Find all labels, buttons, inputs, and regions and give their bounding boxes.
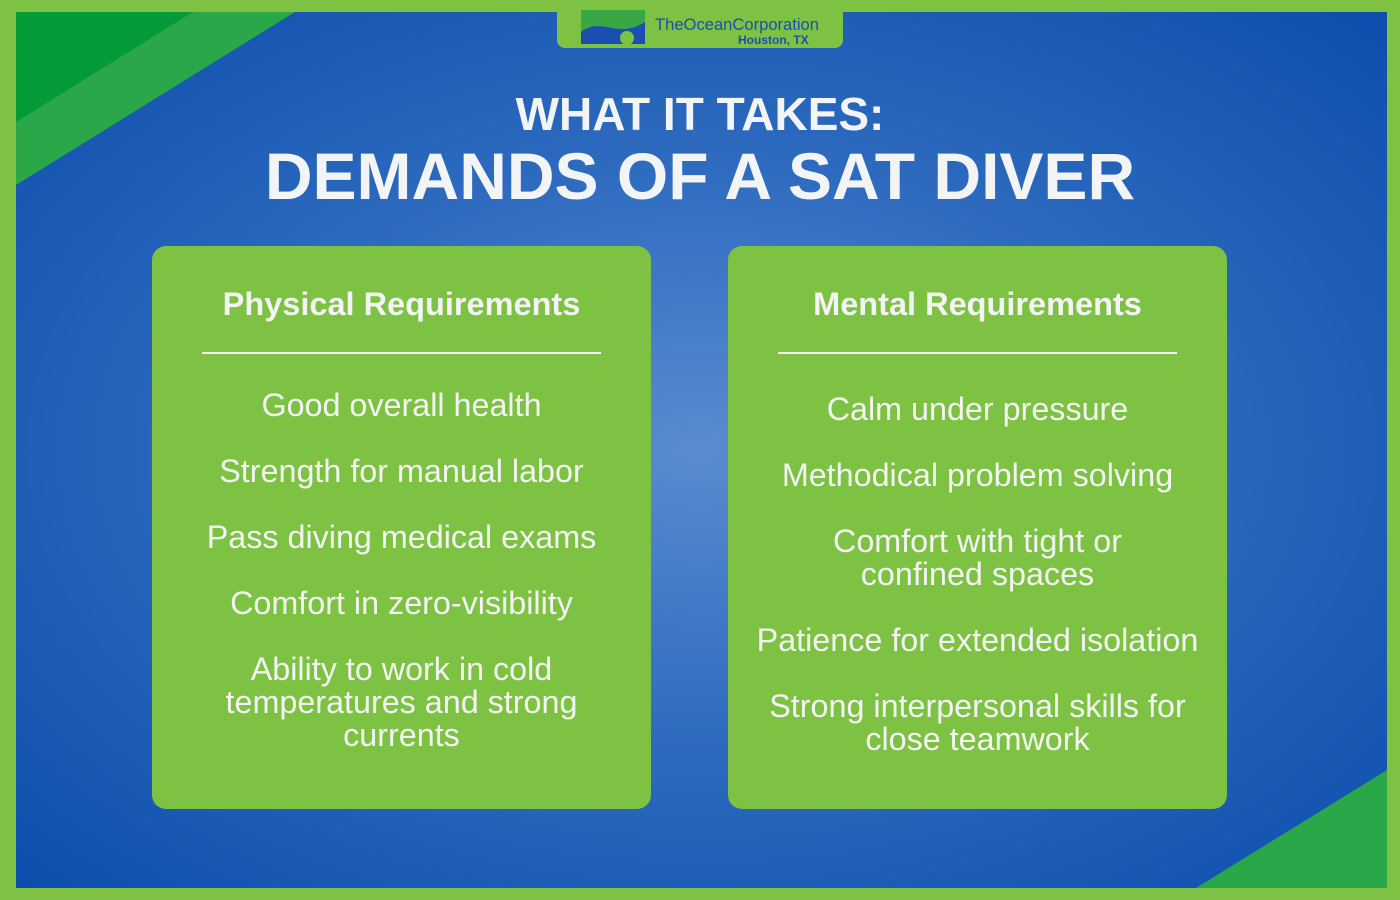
logo text: TheOceanCorporation [655, 15, 819, 34]
decoration: bottom-right triangle [1196, 770, 1387, 888]
panel: physical requirements: currents [343, 717, 460, 753]
panel: physical requirements: Good overall health [261, 387, 542, 423]
panel: mental requirements [728, 246, 1227, 809]
title [265, 88, 1135, 213]
panel: physical requirements: Comfort in zero-visibility [230, 585, 573, 621]
logo [557, 10, 843, 48]
panel: physical requirements: Pass diving medical exams [207, 519, 596, 555]
panel: physical requirements: temperatures and strong [226, 684, 577, 720]
panel: mental requirements: Calm under pressure [827, 391, 1128, 427]
title: DEMANDS OF A SAT DIVER [265, 139, 1135, 213]
list items [757, 391, 1198, 757]
decoration: top-left stripes [16, 12, 295, 185]
panel: mental requirements: Patience for extended isolation [757, 622, 1198, 658]
heading: Mental Requirements [813, 286, 1142, 322]
panel: mental requirements: confined spaces [861, 556, 1094, 592]
icon: wave [581, 6, 645, 45]
panel: mental requirements: close teamwork [865, 721, 1090, 757]
panel: mental requirements: Strong interpersonal skills for [769, 688, 1186, 724]
logo: Houston, TX [738, 33, 809, 47]
panel: physical requirements: Ability to work in cold [251, 651, 552, 687]
panel: physical requirements [152, 246, 651, 809]
panel: mental requirements: Comfort with tight or [833, 523, 1122, 559]
panel: mental requirements: Methodical problem solving [782, 457, 1173, 493]
heading: Physical Requirements [223, 286, 580, 322]
panel: physical requirements: Strength for manual labor [219, 453, 584, 489]
list items [207, 387, 596, 753]
title: WHAT IT TAKES: [516, 88, 884, 140]
